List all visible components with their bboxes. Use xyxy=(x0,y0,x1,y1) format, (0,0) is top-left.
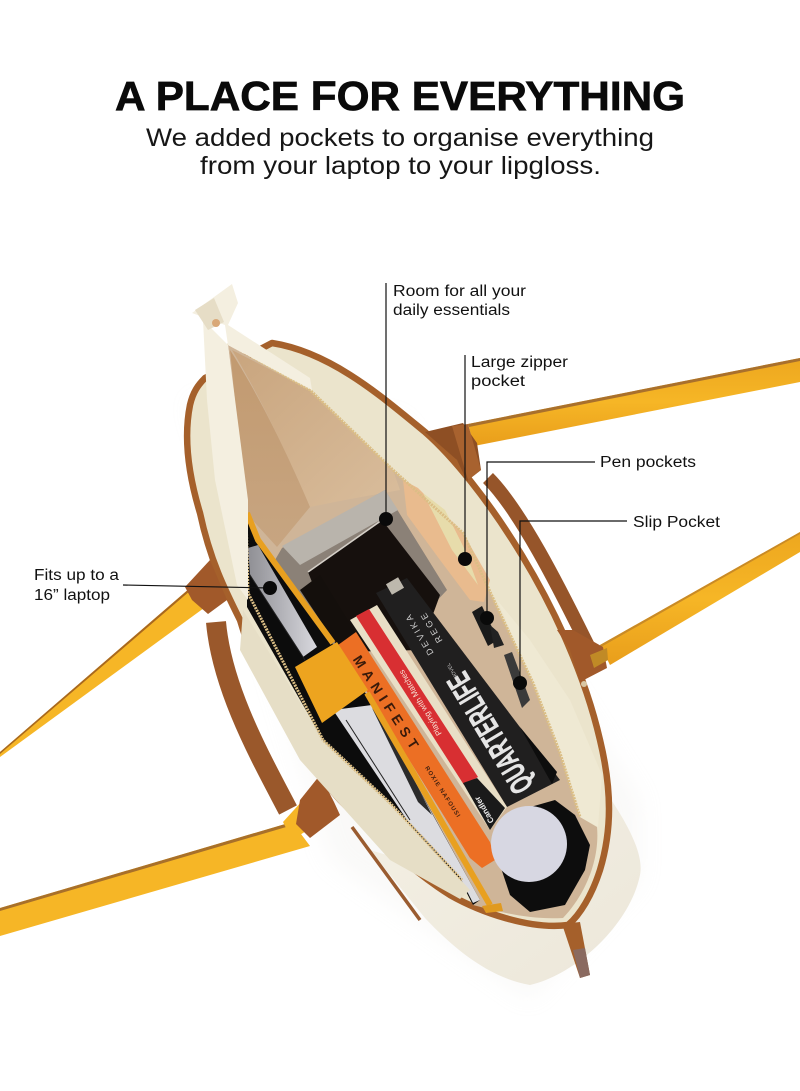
brown loop: upper left xyxy=(185,560,227,614)
food container xyxy=(258,490,447,652)
left zipper pocket xyxy=(240,513,470,899)
laptop compartment xyxy=(247,515,480,905)
handle: left brown xyxy=(216,622,288,810)
callout: large zipper pocket xyxy=(458,354,568,566)
bottle xyxy=(491,800,590,912)
callout: laptop fit xyxy=(34,567,277,604)
subtitle: from your laptop to your lipgloss. xyxy=(200,152,601,180)
strap: upper right xyxy=(468,358,800,446)
thin orange strap xyxy=(247,513,490,905)
bag body exterior xyxy=(370,770,641,985)
brown loop: right top xyxy=(425,423,481,481)
strap: lower right xyxy=(600,532,800,665)
callout: pen pockets: Pen pockets xyxy=(600,454,696,471)
book: Playing with Matches: Playing with Matches xyxy=(397,668,444,737)
bag rim xyxy=(187,343,609,926)
callout: laptop fit: Fits up to a xyxy=(34,567,119,584)
soft shadow xyxy=(190,400,640,1000)
book: Playing with Matches xyxy=(350,605,507,830)
strap end xyxy=(482,903,503,913)
callout: pen pockets xyxy=(480,454,696,625)
hanging tab: left xyxy=(352,827,420,920)
book: Manifest: ROXIE NAFOUSI xyxy=(423,766,461,819)
right zipper pocket xyxy=(228,343,602,827)
callout: room for essentials xyxy=(379,283,526,526)
book: Quarterlife: DEVIKA xyxy=(402,611,436,657)
book: Quarterlife: A NOVEL xyxy=(446,662,462,683)
book: Manifest xyxy=(338,632,495,868)
bag interior xyxy=(228,345,597,918)
callout: slip pocket xyxy=(513,514,721,690)
callout: slip pocket: Slip Pocket xyxy=(633,514,721,531)
front zipper flap xyxy=(192,284,312,600)
book: Playing with Matches: Candler xyxy=(473,795,496,825)
suede band xyxy=(295,642,368,723)
callout: laptop fit: 16” laptop xyxy=(34,587,110,604)
lining: side wall xyxy=(230,350,310,547)
book: Manifest: MANIFEST xyxy=(350,652,422,752)
pocket pouch xyxy=(403,480,490,602)
book: Quarterlife: QUARTERLIFE xyxy=(440,666,540,800)
strap: upper left xyxy=(0,588,204,757)
pens xyxy=(472,606,530,708)
handle: right brown xyxy=(488,478,590,650)
callout: large zipper pocket: Large zipper xyxy=(471,354,568,371)
subtitle: We added pockets to organise everything xyxy=(146,124,654,152)
brown loop: lower left xyxy=(283,775,340,840)
strap: lower left xyxy=(0,822,310,936)
callout: room for essentials: Room for all your xyxy=(393,283,526,300)
lining: back wall xyxy=(232,350,400,507)
title: A PLACE FOR EVERYTHING xyxy=(115,73,685,119)
book: Quarterlife: REGE xyxy=(418,609,444,645)
subtitle xyxy=(146,124,654,180)
tote bag illustration xyxy=(0,284,800,1000)
bottom seam tab xyxy=(562,922,590,978)
brown loop: right lower xyxy=(557,630,608,687)
callout: room for essentials: daily essentials xyxy=(393,302,510,319)
callout: large zipper pocket: pocket xyxy=(471,373,526,390)
